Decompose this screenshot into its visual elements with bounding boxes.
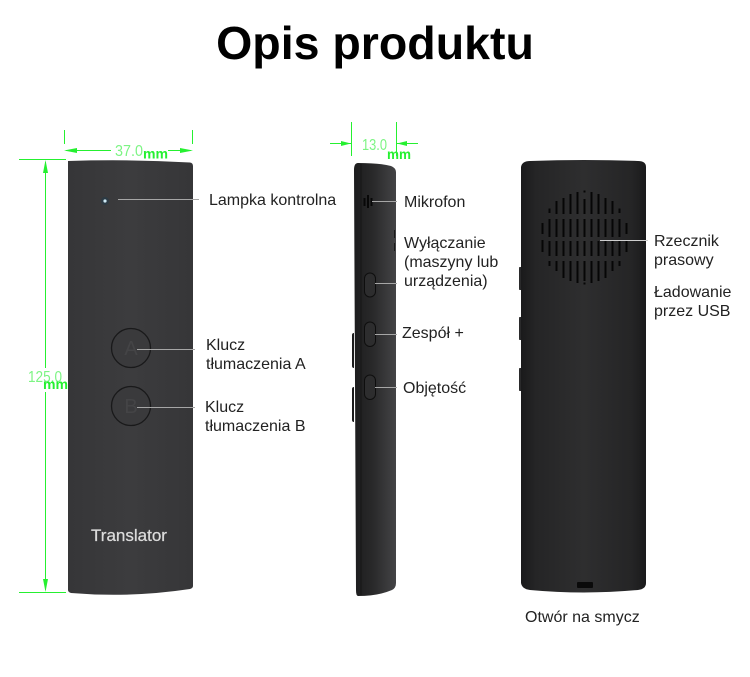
- label: speaker: prasowy: [654, 252, 714, 269]
- label: power off: (maszyny lub: [404, 254, 498, 271]
- height dimension 125.0 mm: 125.0: [28, 369, 62, 386]
- title: Opis produktu: [216, 17, 534, 69]
- side volume bumps: [352, 333, 354, 422]
- label: lanyard hole: Otwór na smycz: [525, 609, 640, 626]
- label: power off: Wyłączanie: [404, 235, 486, 252]
- device brand text: Translator: [91, 526, 167, 545]
- back view of device: [519, 160, 646, 592]
- label: USB charging: przez USB: [654, 303, 730, 320]
- translation key A: [112, 328, 150, 368]
- speaker grille: [542, 190, 626, 284]
- label: translation key A: Klucz: [206, 337, 245, 354]
- width dimension 37.0 mm: 37.0: [115, 143, 143, 160]
- translation key B: B: [124, 396, 138, 418]
- side view of device: [352, 163, 396, 596]
- indicator lamp: [101, 197, 109, 205]
- translation key B: [112, 386, 150, 426]
- width dimension 37.0 mm: [64, 130, 193, 162]
- translation key A: A: [124, 338, 138, 360]
- side device body: [354, 163, 396, 596]
- width dimension 13.0 mm: [330, 122, 418, 162]
- leader lines: [118, 200, 648, 408]
- back buttons: [519, 267, 521, 391]
- label: microphone: Mikrofon: [404, 194, 465, 211]
- power button: [364, 273, 376, 297]
- back device body: [521, 160, 646, 592]
- label: volume plus: Zespół +: [402, 325, 464, 342]
- microphone slots: [364, 195, 372, 208]
- lanyard hole: [577, 582, 593, 588]
- width dimension 13.0 mm: 13.0: [362, 137, 387, 154]
- label: volume: Objętość: [403, 380, 466, 397]
- volume minus button: [364, 375, 376, 400]
- label: indicator lamp: Lampka kontrolna: [209, 192, 336, 209]
- label: speaker: Rzecznik: [654, 233, 719, 250]
- label: translation key A: tłumaczenia A: [206, 356, 306, 373]
- height dimension 125.0 mm: [19, 160, 68, 592]
- volume plus button: [364, 322, 376, 346]
- front device body: [68, 160, 193, 595]
- label: translation key B: Klucz: [205, 399, 244, 416]
- label: translation key B: tłumaczenia B: [205, 418, 306, 435]
- label: power off: urządzenia): [404, 273, 488, 290]
- height dimension 125.0 mm: mm: [43, 376, 68, 392]
- width dimension 37.0 mm: mm: [143, 146, 168, 162]
- width dimension 13.0 mm: mm: [387, 146, 411, 162]
- label: USB charging: Ładowanie: [654, 284, 731, 301]
- front view of device: [68, 160, 193, 595]
